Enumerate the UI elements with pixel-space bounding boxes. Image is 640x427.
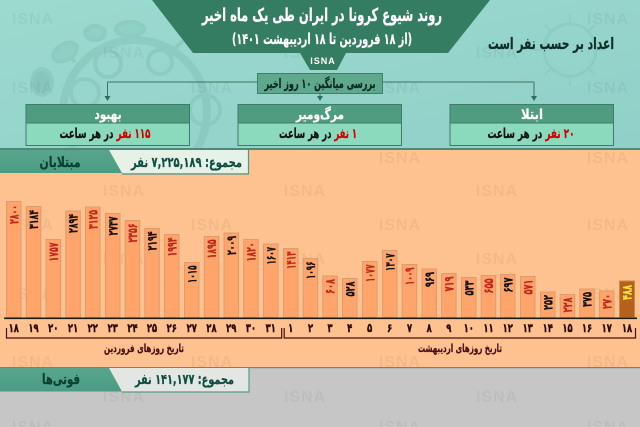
watermark: ISNA on chart: ISNA: [476, 183, 518, 200]
day labels: ۲۹: [226, 322, 237, 335]
watermark: ISNA on chart: ISNA: [103, 251, 145, 268]
watermark: ISNA on chart: ISNA: [587, 354, 629, 371]
day labels: ۲۴: [127, 322, 138, 335]
day labels: ۷: [407, 322, 413, 335]
watermark: ISNA grid: ISNA: [191, 11, 233, 28]
watermark: ISNA on chart: ISNA: [12, 217, 54, 234]
title banner: [152, 0, 490, 53]
panel: recovery: بهبود: [94, 107, 122, 123]
ISNA tab: ISNA: [310, 56, 336, 66]
panel: infections: ۲۰ نفر در هر ساعت: [488, 126, 574, 142]
day labels: ۲۱: [68, 322, 78, 335]
watermark: ISNA on chart: ISNA: [587, 217, 629, 234]
day labels: ۵: [367, 322, 372, 335]
watermark: ISNA grid: ISNA: [103, 45, 145, 62]
deaths heading: فوتی‌ها: [42, 372, 80, 388]
bar value labels: ۱۴۱۳: [284, 251, 299, 269]
bar value labels: ۳۷۵: [580, 292, 595, 307]
watermark: ISNA on chart: ISNA: [587, 150, 629, 167]
day labels: ۲۲: [88, 322, 98, 335]
bar value labels: ۱۳۰۷: [383, 253, 398, 271]
bar value labels: ۱۰۹۶: [304, 262, 319, 279]
watermark: ISNA on chart: ISNA: [284, 183, 326, 200]
panel: deaths: مرگ‌ومیر: [295, 106, 344, 123]
bar value labels: ۱۷۵۷: [46, 242, 62, 262]
watermark: ISNA on chart: ISNA: [12, 354, 54, 371]
watermark: ISNA on chart: ISNA: [379, 217, 421, 234]
bar value labels: ۱۹۹۴: [164, 237, 180, 257]
day labels: ۳۱: [266, 322, 276, 335]
chart background: [0, 148, 640, 368]
chart axis line: [4, 318, 637, 319]
bar value labels: ۲۳۵۶: [125, 224, 141, 243]
day labels: ۲: [308, 322, 314, 335]
watermark: ISNA grid: ISNA: [284, 45, 326, 62]
day labels: ۲۶: [167, 322, 177, 335]
day labels: ۱۴: [543, 322, 553, 335]
deaths total: مجموع: ۱۴۱,۱۷۷ نفر: [134, 372, 234, 388]
bar value labels: ۵۷۱: [521, 280, 536, 294]
average label box: [258, 74, 382, 94]
average label box: بررسی میانگین ۱۰ روز اخیر: [264, 76, 376, 92]
infections heading: مبتلایان: [40, 155, 80, 171]
watermark: ISNA on chart: ISNA: [379, 354, 421, 371]
watermark: ISNA on grey: ISNA: [103, 389, 145, 406]
day labels: ۲۷: [187, 322, 197, 335]
day labels: ۱۹: [28, 322, 39, 335]
icon: small virus watermark: [534, 14, 606, 86]
header background: [0, 0, 640, 148]
watermark: ISNA on chart: ISNA: [191, 150, 233, 167]
bar value labels: ۹۶۹: [422, 272, 437, 287]
panel: recovery: ۱۱۵ نفر در هر ساعت: [60, 126, 150, 142]
bar value labels: ۶۵۵: [481, 278, 497, 293]
bar value labels: ۲۰۰۹: [224, 236, 240, 255]
day labels: ۱: [288, 322, 293, 335]
bar value labels: ۱۶۰۷: [264, 247, 279, 264]
day labels: ۱۸: [622, 322, 633, 335]
bar value labels: ۱۰۱۵: [185, 265, 200, 283]
watermark: ISNA on grey: [12, 389, 629, 427]
day labels: ۶: [387, 322, 392, 335]
day labels: ۱۳: [523, 322, 533, 335]
title: روند شیوع کرونا در ایران طی یک ماه اخیر: [201, 5, 442, 26]
day labels: ۱۶: [582, 322, 592, 335]
deaths section background: [0, 368, 640, 427]
bar chart: daily infections: [6, 202, 634, 318]
watermark: ISNA grid: ISNA: [476, 45, 518, 62]
watermark: ISNA on chart: [12, 150, 629, 371]
panel: infections: [450, 104, 614, 146]
infections total: مجموع: ۷,۲۲۵,۱۸۹ نفر: [130, 155, 242, 171]
caption: Farvardin dates: تاریخ روزهای فروردین: [104, 342, 184, 355]
bracket: Farvardin: [6, 328, 282, 338]
caption: Ordibehesht dates: تاریخ روزهای اردیبهشت: [418, 342, 502, 355]
watermark: ISNA grid: ISNA: [379, 80, 421, 97]
ISNA tab: [300, 53, 346, 70]
bar value labels: ۱۸۲۰: [244, 242, 259, 262]
watermark: ISNA on chart: ISNA: [476, 251, 518, 268]
day labels: ۱۵: [562, 322, 573, 335]
bar value labels: ۳۱۸۴: [26, 210, 42, 229]
deaths section band: [0, 367, 640, 392]
bar value labels: ۲۱۹۴: [145, 231, 160, 251]
day labels: ۱۰: [464, 322, 474, 335]
bar value labels: ۲۷۳۷: [105, 216, 121, 236]
panel: deaths: ۱ نفر در هر ساعت: [279, 126, 357, 142]
bar value labels: ۲۸۰۰: [6, 205, 22, 224]
bar value labels: ۲۸۹۴: [66, 214, 81, 233]
icon: large virus watermark: [32, 22, 220, 184]
bar value labels: ۲۷۰: [599, 294, 615, 309]
connector arrows: [104, 82, 537, 101]
day labels: ۳: [327, 322, 333, 335]
day labels: ۲۸: [206, 322, 217, 335]
bracket: Ordibehesht: [284, 328, 636, 338]
bar value labels: ۱۰۷۷: [363, 264, 378, 282]
watermark: ISNA on chart: ISNA: [12, 286, 54, 303]
day labels: ۱۷: [602, 322, 612, 335]
bar value labels: ۶۹۷: [501, 277, 516, 292]
bar value labels: ۱۸۹۵: [204, 239, 220, 259]
day labels: ۱۸: [9, 322, 19, 335]
watermark: ISNA grid: ISNA: [379, 11, 421, 28]
bar value labels: ۷۱۹: [442, 276, 457, 291]
bar value labels: ۵۲۸: [342, 281, 358, 296]
watermark: ISNA grid: ISNA: [12, 11, 54, 28]
day labels: ۱۱: [483, 322, 494, 335]
day labels: ۴: [347, 322, 352, 335]
watermark: ISNA on chart: ISNA: [284, 251, 326, 268]
day labels: ۲۰: [48, 322, 58, 335]
bar value labels: ۱۰۰۹: [403, 267, 418, 285]
bar value labels: ۳۱۲۵: [85, 210, 101, 229]
watermark: ISNA grid: ISNA: [191, 80, 233, 97]
bar value labels: ۶۰۸: [323, 279, 338, 294]
bar value labels: ۲۵۲: [540, 295, 556, 310]
watermark: ISNA on chart: ISNA: [587, 286, 629, 303]
subtitle: (از ۱۸ فروردین تا ۱۸ اردیبهشت ۱۴۰۱): [232, 30, 412, 48]
panel: infections: ابتلا: [521, 107, 543, 123]
panel: deaths: [238, 104, 402, 146]
day labels: ۹: [446, 322, 452, 335]
day labels: ۱۲: [503, 322, 513, 335]
bar value labels: [6, 205, 635, 312]
day labels: [9, 322, 633, 335]
watermark: ISNA grid: ISNA: [587, 11, 629, 28]
day labels: ۸: [427, 322, 432, 335]
bar value labels: ۵۳۳: [461, 280, 477, 295]
watermark: ISNA grid: ISNA: [12, 80, 54, 97]
watermark: ISNA on grey: ISNA: [284, 389, 326, 406]
day labels: ۲۵: [147, 322, 157, 335]
panel: recovery: [26, 104, 190, 146]
infections section band: [0, 148, 640, 174]
bar value labels: ۲۲۸: [560, 297, 576, 312]
watermark: ISNA grid: ISNA: [587, 80, 629, 97]
watermark: ISNA grid: [12, 11, 629, 97]
watermark: ISNA on grey: ISNA: [476, 389, 518, 406]
watermark: ISNA on chart: ISNA: [379, 150, 421, 167]
watermark: ISNA on chart: ISNA: [103, 183, 145, 200]
watermark: ISNA on chart: ISNA: [191, 217, 233, 234]
bar value labels: ۴۸۸: [620, 285, 635, 300]
day labels: ۲۳: [108, 322, 118, 335]
watermark: ISNA on chart: ISNA: [191, 354, 233, 371]
day labels: ۳۰: [246, 322, 256, 335]
